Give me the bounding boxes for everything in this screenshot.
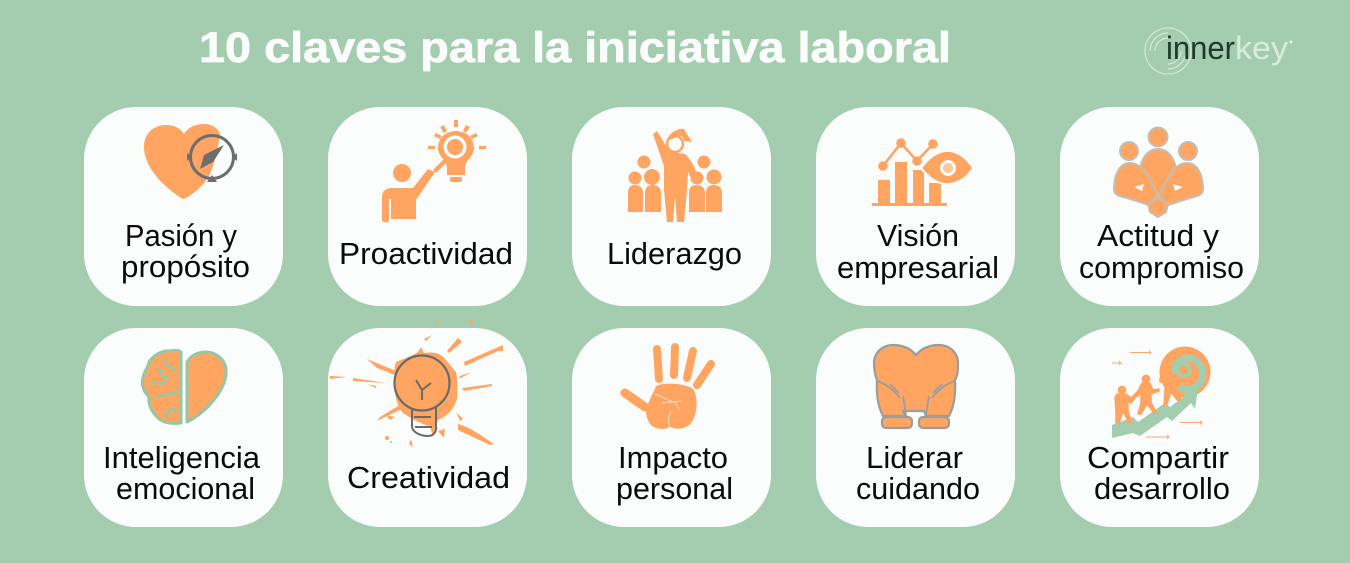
panel: Proactividad <box>328 107 527 306</box>
label: Inteligencia <box>103 440 261 475</box>
panel: Visión empresarial <box>816 107 1015 306</box>
label: Creatividad <box>347 460 510 495</box>
icon: hand print <box>625 347 711 429</box>
label: personal <box>616 471 733 506</box>
panel: Impacto personal <box>572 328 771 527</box>
label: empresarial <box>837 250 999 285</box>
label <box>837 218 999 285</box>
label: Compartir <box>1087 440 1229 475</box>
label <box>1079 218 1244 285</box>
label <box>121 218 250 284</box>
panel: Actitud y compromiso <box>1060 107 1259 306</box>
panel: Inteligencia emocional <box>84 328 283 527</box>
label: Impacto <box>618 440 728 475</box>
icon: light bulb with paint splash <box>330 320 503 447</box>
label: Visión <box>877 218 959 253</box>
panel: Liderar cuidando <box>816 328 1015 527</box>
panel: Pasión y propósito <box>84 107 283 306</box>
label: Proactividad <box>339 236 513 271</box>
logo: innerkey: inner <box>1166 30 1235 66</box>
label <box>103 440 261 506</box>
logo: innerkey: key <box>1235 30 1288 66</box>
icon: team joining hands <box>1114 128 1203 217</box>
label: Liderar <box>866 440 963 475</box>
logo: innerkey <box>1145 28 1292 74</box>
icon: heart with compass <box>144 124 237 199</box>
panel: Liderazgo <box>572 107 771 306</box>
label: Pasión y <box>125 218 237 253</box>
panel: Compartir desarrollo <box>1060 328 1259 527</box>
label: Actitud y <box>1097 218 1220 253</box>
panel: Creatividad <box>328 320 527 527</box>
title: 10 claves para la iniciativa laboral <box>199 24 951 72</box>
label: desarrollo <box>1094 471 1230 506</box>
label: cuidando <box>856 471 980 506</box>
label: propósito <box>121 249 250 284</box>
icon: brain and heart halves <box>142 350 226 423</box>
icon: bar chart with eye <box>872 138 973 206</box>
label <box>856 440 980 506</box>
label: compromiso <box>1079 250 1244 285</box>
icon: leader with group <box>628 129 722 222</box>
icon: people climbing growth arrow to target <box>1112 346 1210 439</box>
label <box>1087 440 1230 506</box>
icon: hands holding heart <box>874 345 958 428</box>
label <box>616 440 733 506</box>
icon: person touching light bulb <box>382 120 486 222</box>
label: emocional <box>116 471 255 506</box>
label: Liderazgo <box>607 236 742 271</box>
